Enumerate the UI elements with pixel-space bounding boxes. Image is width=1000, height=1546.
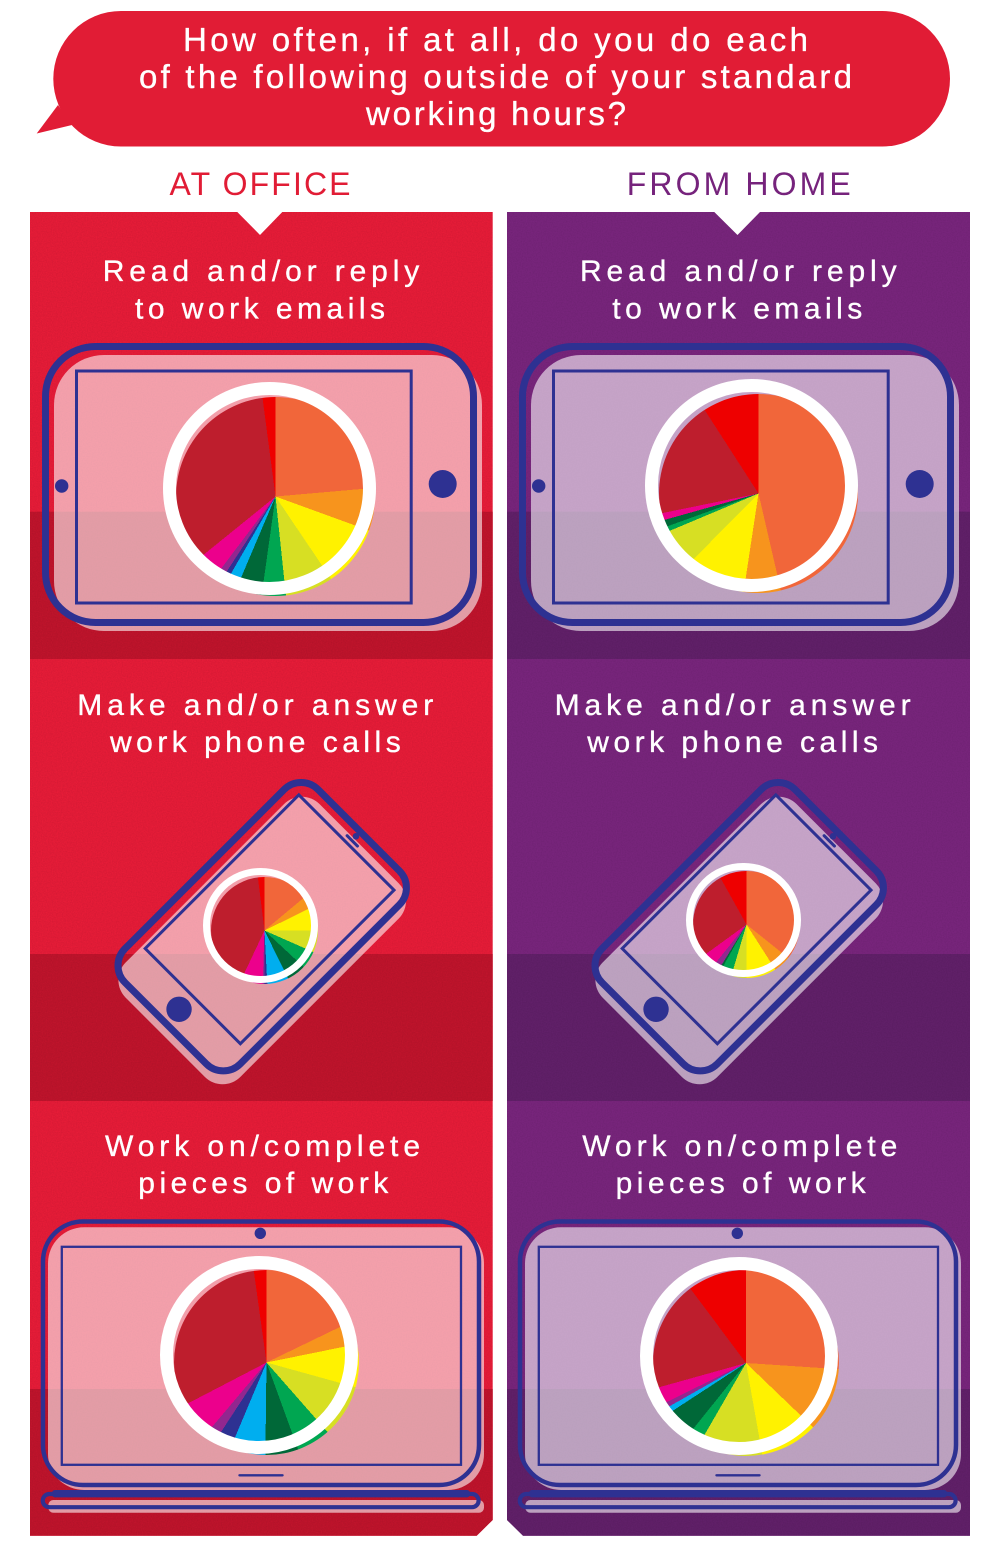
speech bubble: question: How often, if at all, do you do each xyxy=(183,21,808,58)
heading: from home: FROM HOME xyxy=(627,166,851,202)
laptop: office, pieces of work xyxy=(40,1219,484,1513)
speech bubble: question: working hours? xyxy=(365,95,626,132)
label: office pieces of work: pieces of work xyxy=(138,1167,389,1200)
label: home read emails: Read and/or reply xyxy=(580,255,897,288)
panel: from home xyxy=(507,212,970,1536)
label: office phone calls: work phone calls xyxy=(109,726,401,759)
label: home phone calls: Make and/or answer xyxy=(555,689,911,722)
pie chart: office, read emails xyxy=(176,397,375,596)
label: office read emails xyxy=(103,255,419,326)
label: office pieces of work: Work on/complete xyxy=(105,1130,420,1163)
white ring xyxy=(160,1256,358,1454)
speech bubble: question xyxy=(37,11,950,146)
label: home read emails: to work emails xyxy=(612,292,862,326)
speech bubble: question: of the following outside of your standard xyxy=(139,58,852,95)
phone: office, phone calls xyxy=(114,779,410,1084)
label: office read emails: Read and/or reply xyxy=(103,255,419,288)
heading: at office: AT OFFICE xyxy=(170,166,350,202)
label: office pieces of work xyxy=(105,1130,420,1200)
white ring xyxy=(203,868,318,983)
white ring xyxy=(163,382,376,595)
label: home pieces of work: Work on/complete xyxy=(582,1130,897,1163)
white ring xyxy=(640,1257,838,1455)
label: office read emails: to work emails xyxy=(135,292,385,326)
pie chart: home, pieces of work xyxy=(653,1270,839,1456)
tablet: office, read emails xyxy=(42,343,482,631)
pie chart: office, pieces of work xyxy=(174,1270,358,1455)
label: home phone calls: work phone calls xyxy=(586,726,878,759)
panel: at office xyxy=(30,212,493,1536)
pie chart: home, read emails xyxy=(659,394,858,593)
pie chart: home, phone calls xyxy=(693,871,800,978)
tablet: home, read emails xyxy=(519,343,959,631)
white ring xyxy=(686,863,801,977)
label: home pieces of work xyxy=(582,1130,897,1200)
laptop: home, pieces of work xyxy=(518,1219,961,1513)
label: home phone calls xyxy=(555,689,911,759)
label: office phone calls xyxy=(77,689,433,759)
label: home read emails xyxy=(580,255,897,326)
label: office phone calls: Make and/or answer xyxy=(77,689,433,722)
phone: home, phone calls xyxy=(592,779,887,1084)
pie chart: office, phone calls xyxy=(211,876,318,984)
white ring xyxy=(645,379,858,592)
label: home pieces of work: pieces of work xyxy=(616,1167,867,1200)
